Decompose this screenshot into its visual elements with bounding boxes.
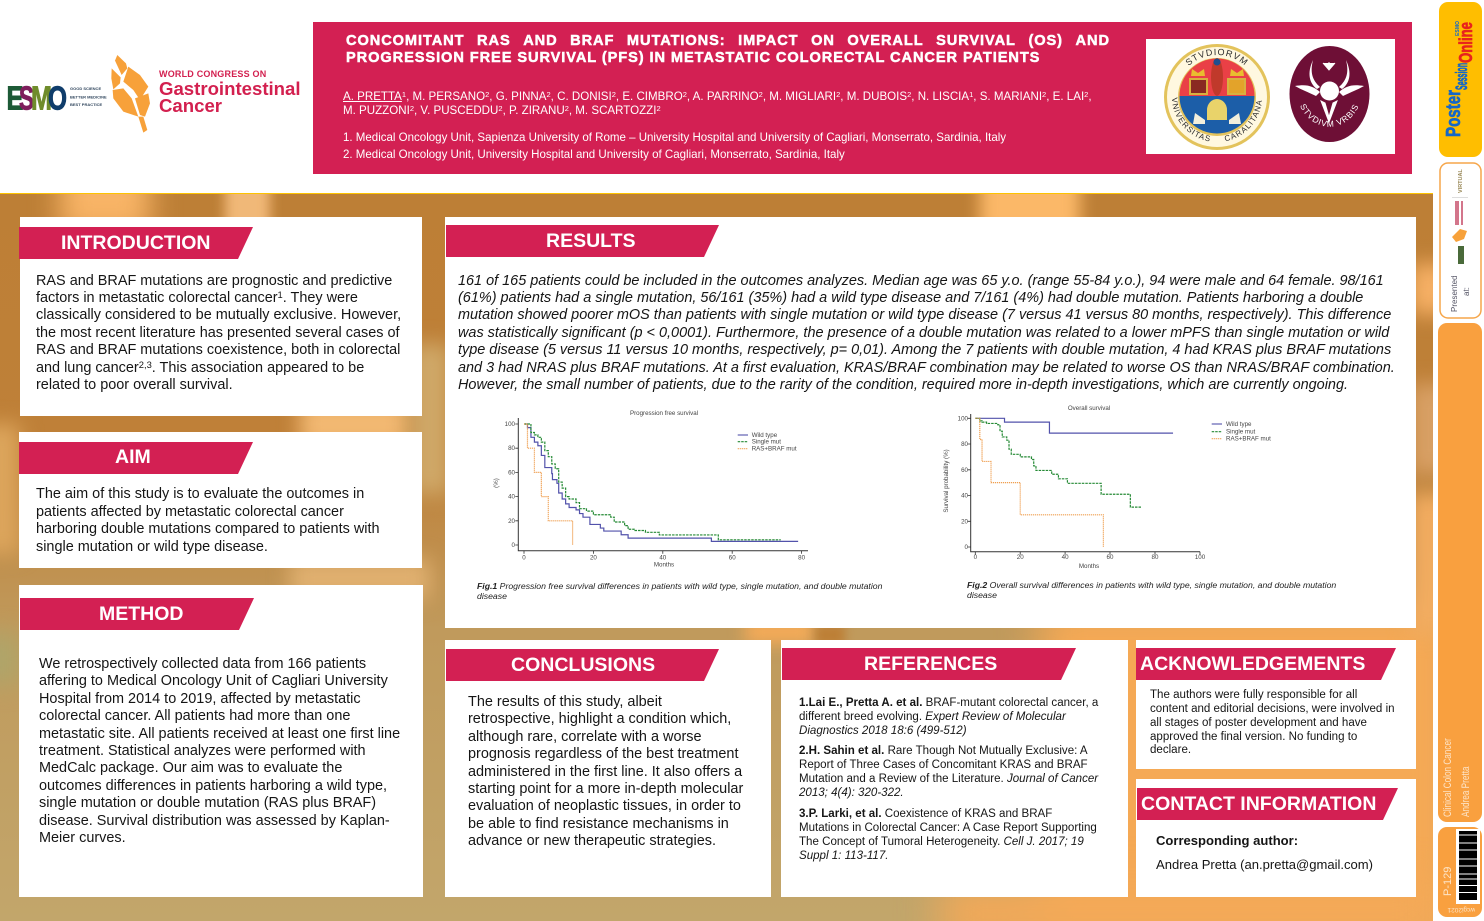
text: conclusions: prognosis regardless of the best treatment	[468, 746, 738, 762]
text: aim: patients affected by metastatic colorectal cancer	[36, 504, 344, 520]
panel: method	[19, 585, 423, 897]
text: acknowledgements: The authors were fully responsible for all	[1150, 689, 1357, 701]
figure 2 caption: Fig.2 Overall survival differences in patients with wild type, single mutation, and double mutation	[967, 580, 1336, 590]
chart: progression free survival: 20	[508, 518, 516, 525]
authors: M. PUZZONI2, V. PUSCEDDU2, P. ZIRANU2, M. SCARTOZZI2	[343, 104, 661, 117]
text: method: single mutation or double mutation (RAS plus BRAF)	[39, 795, 376, 811]
chart: overall survival: 40	[961, 492, 969, 500]
panel: aim	[19, 432, 422, 568]
text: method	[39, 656, 400, 846]
poster title: IMPACT	[738, 33, 798, 49]
text: acknowledgements: all stages of poster development and have	[1150, 717, 1367, 729]
legend: Wild type	[1226, 421, 1252, 428]
sidebar tab: session and author: Clinical Colon Cancer	[1442, 738, 1454, 817]
figure 1 caption: disease	[477, 591, 507, 601]
ESMO motto	[70, 86, 107, 107]
text: conclusions: evaluation of neoplastic tissues, in order to	[468, 798, 741, 814]
ESMO motto: BETTER MEDICINE	[70, 94, 107, 100]
text: method: colorectal cancer. All patients had more than one	[39, 708, 350, 724]
reference 1	[799, 697, 1098, 737]
panel: introduction	[20, 217, 422, 416]
heading: aim	[19, 442, 253, 474]
legend: Wild type	[752, 432, 778, 439]
panel: references	[781, 640, 1128, 897]
legend: RAS+BRAF mut	[1226, 436, 1271, 443]
chart: overall survival: 0	[965, 544, 969, 551]
logo: ESMO	[6, 80, 107, 116]
ESMO letters: O	[48, 80, 67, 116]
chart: overall survival: 80	[1152, 554, 1159, 561]
poster title: AND	[1076, 33, 1110, 49]
text: conclusions: retrospective, highlight a condition which,	[468, 711, 731, 727]
reference 2: 2013; 4(4): 320-322.	[799, 787, 904, 799]
congress title: Cancer	[159, 95, 222, 116]
heading: contact information: CONTACT INFORMATION	[1141, 793, 1376, 815]
reference 2: Mutation and a Review of the Literature. Journal of Cancer	[799, 773, 1098, 785]
text: acknowledgements: declare.	[1150, 744, 1191, 756]
text: introduction: classically considered to be mutually exclusive. However,	[36, 307, 401, 323]
text: results: 161 of 165 patients could be included in the outcomes analyzes. Median age was 65 y.o. (range 55-84 y.o.), 94 were male and 64 female. 98/161	[458, 272, 1384, 288]
heading: results	[446, 225, 719, 257]
congress title	[159, 68, 301, 116]
reference 3: 3.P. Larki, et al. Coexistence of KRAS and BRAF	[799, 808, 1052, 820]
reference 3: The Concept of Tumoral Heterogeneity. Cell J. 2017; 19	[799, 836, 1084, 848]
reference 2: Report of Three Cases of Concomitant KRAS and BRAF	[799, 759, 1088, 771]
text: acknowledgements: content and editorial decisions, were involved in	[1150, 703, 1395, 715]
curve: wild type	[524, 424, 798, 541]
sidebar tab: poster session online: Session	[1452, 63, 1471, 90]
poster title: AND	[523, 33, 558, 49]
affiliations: 2. Medical Oncology Unit, University Hospital and University of Cagliari, Monserrato, Sardinia, Italy	[343, 149, 845, 161]
chart: progression free survival: 40	[659, 554, 667, 562]
congress title: Gastrointestinal	[159, 78, 301, 99]
congress title: WORLD CONGRESS ON	[159, 68, 266, 78]
text: conclusions: although rare, correlate with a worse	[468, 729, 702, 745]
authors	[343, 90, 1092, 117]
reference 3	[799, 808, 1097, 862]
chart: progression free survival: 40	[508, 494, 516, 500]
ESMO letters: E	[6, 80, 24, 116]
heading: references	[782, 648, 1076, 680]
chart: progression free survival: Progression free survival	[630, 410, 698, 417]
text: introduction: and lung cancer2,3. This association appeared to be	[36, 359, 364, 376]
chart: overall survival: 100	[1195, 554, 1206, 561]
chart: overall survival: 100	[958, 416, 969, 422]
text: conclusions: The results of this study, albeit	[468, 694, 662, 710]
reference 1: Diagnostics 2018 18:6 (499-512)	[799, 725, 967, 737]
chart: progression free survival: 80	[798, 554, 806, 562]
chart: overall survival	[943, 405, 1271, 570]
seal: University of Cagliari: VNIVERSITAS	[1172, 97, 1210, 142]
chart: progression free survival: 80	[508, 445, 516, 452]
heading: acknowledgements	[1136, 648, 1396, 680]
university logos	[1146, 39, 1395, 154]
chart: overall survival: Survival probability (%)	[943, 449, 950, 513]
chart: overall survival: Months	[1079, 563, 1099, 570]
text: introduction: RAS and BRAF mutations coexistence, both in colorectal	[36, 342, 400, 358]
poster title: BRAF	[570, 33, 614, 49]
chart: progression free survival: 0	[522, 554, 526, 562]
sidebar tab: poster number and barcode	[1438, 827, 1482, 917]
chart: progression free survival: 20	[590, 554, 597, 562]
chart: progression free survival: Months	[654, 562, 674, 568]
sidebar tab: poster session online: ESMO	[1455, 21, 1461, 36]
chart: overall survival: 20	[961, 518, 969, 526]
legend: RAS+BRAF mut	[752, 446, 797, 453]
panel: conclusions	[445, 640, 771, 897]
header panel	[313, 22, 1412, 174]
heading: contact information	[1137, 788, 1398, 820]
text: method: outcomes differences in patients harboring a wild type,	[39, 778, 387, 794]
text: results	[458, 272, 1395, 393]
chart: overall survival: 20	[1017, 554, 1024, 561]
chart: overall survival: Overall survival	[1068, 405, 1110, 412]
ESMO letters: M	[31, 80, 52, 116]
legend: Single mut	[752, 439, 781, 446]
heading: conclusions	[446, 649, 719, 681]
legend: Single mut	[1226, 429, 1256, 436]
curve: single mutation	[524, 424, 781, 540]
reference 3: Mutations in Colorectal Cancer: A Case Report Supporting	[799, 822, 1097, 834]
sidebar tab: poster session online	[1439, 2, 1482, 157]
text: aim: single mutation or wild type disease.	[36, 539, 268, 555]
poster title: SURVIVAL	[936, 33, 1016, 49]
text: contact details: Andrea Pretta (an.pretta@gmail.com)	[1156, 857, 1373, 872]
chart: progression free survival: (%)	[493, 478, 500, 488]
legend	[1212, 421, 1271, 443]
heading: acknowledgements: ACKNOWLEDGEMENTS	[1140, 653, 1365, 675]
sidebar tab: poster number and barcode: P-129	[1442, 867, 1454, 896]
affiliations: 1. Medical Oncology Unit, Sapienza University of Rome – University Hospital and University of Cagliari, Monserrato, Sardinia, Italy	[343, 132, 1006, 144]
poster title	[346, 33, 1110, 66]
text: acknowledgements	[1150, 689, 1395, 756]
poster title: (OS)	[1028, 33, 1063, 49]
seal: University of Cagliari: CARALITANA	[1224, 100, 1262, 141]
poster title: MUTATIONS:	[627, 33, 726, 49]
text: contact details: Corresponding author:	[1156, 833, 1298, 848]
sidebar tab: session and author: Andrea Pretta	[1460, 766, 1472, 817]
panel: acknowledgements	[1136, 640, 1416, 769]
poster title: ON	[811, 33, 835, 49]
seal: Sapienza: STVDIVM VRBIS	[1300, 104, 1358, 127]
text: introduction	[36, 272, 401, 393]
text: results: However, the small number of patients, due to the rarity of the condition, required more in-depth investigations, which are currently ongoing.	[458, 377, 1348, 393]
text: aim: The aim of this study is to evaluate the outcomes in	[36, 486, 364, 502]
text: method: Hospital from 2014 to 2019, affected by metastatic	[39, 691, 361, 707]
reference 2: 2.H. Sahin et al. Rare Though Not Mutually Exclusive: A	[799, 745, 1088, 757]
text: method: affering to Medical Oncology Unit of Cagliari University	[39, 673, 388, 689]
figure 2 caption: disease	[967, 590, 997, 600]
chart: progression free survival	[493, 410, 808, 568]
panel: contact information	[1136, 779, 1416, 897]
seal: University of Cagliari	[1164, 44, 1270, 150]
sidebar tab: presented at: VIRTUAL	[1458, 169, 1464, 193]
figure 1 caption: Fig.1 Progression free survival differences in patients with wild type, single mutation, and double mutation	[477, 580, 882, 590]
text: conclusions: starting point for a more in-depth molecular	[468, 781, 743, 797]
text: introduction: the most recent literature has presented several cases of	[36, 325, 400, 341]
reference 2	[798, 745, 1098, 799]
text: acknowledgements: approved the final version. No funding to	[1150, 731, 1357, 743]
text: conclusions: advance or new therapeutic strategies.	[468, 833, 716, 849]
text: method: MedCalc package. Our aim was to evaluate the	[39, 760, 342, 776]
poster title: RAS	[477, 33, 511, 49]
text: conclusions: administered in the first line. It also offers a	[468, 764, 742, 780]
text: results: mutation showed poorer mOS than patients with single mutation or wild type disease (7 versus 41 versus 80 months, respectively). This difference	[458, 307, 1391, 323]
figure 2 caption	[967, 580, 1336, 600]
text: method: treatment. Statistical analyzes were performed with	[39, 743, 366, 759]
seal: Sapienza	[1290, 46, 1370, 142]
seal: University of Cagliari: STVDIORVM	[1186, 48, 1248, 65]
chart: progression free survival: 0	[512, 542, 516, 549]
text: introduction: RAS and BRAF mutations are prognostic and predictive	[36, 272, 392, 288]
sidebar tab: presented at: Presented	[1450, 276, 1459, 312]
text: contact details	[1156, 833, 1373, 872]
reference 1: 1.Lai E., Pretta A. et al. BRAF-mutant colorectal cancer, a	[799, 697, 1098, 709]
ESMO letters: S	[19, 80, 34, 116]
sidebar tab: poster number and barcode: wcgi2021	[1447, 906, 1476, 913]
chart: overall survival: 80	[961, 441, 969, 448]
text: method: disease. Survival distribution was assessed by Kaplan-	[39, 813, 390, 829]
poster title: PROGRESSION FREE SURVIVAL (PFS) IN METASTATIC COLORECTAL CANCER PATIENTS	[346, 50, 1040, 66]
chart: progression free survival: 60	[729, 554, 736, 562]
heading: introduction	[19, 227, 253, 259]
chart: progression free survival: 100	[505, 421, 516, 428]
chart: overall survival: 60	[1107, 554, 1114, 561]
heading: references: REFERENCES	[864, 653, 997, 675]
text: aim: harboring double mutations compared to patients with	[36, 521, 380, 537]
text: conclusions: be able to find resistance mechanisms in	[468, 816, 729, 832]
sidebar tab: poster session online: Poster	[1443, 90, 1465, 137]
text: method: Meier curves.	[39, 830, 126, 846]
poster title: OVERALL	[847, 33, 924, 49]
text: introduction: related to poor overall survival.	[36, 377, 233, 393]
text: results: (61%) patients had a single mutation, 56/161 (35%) had a wild type disease and 7/161 (4%) had double mutation. Patients harboring a double	[458, 290, 1363, 306]
heading: results: RESULTS	[546, 230, 636, 252]
text: results: and 3 had NRAS plus BRAF mutations. At a first evaluation, KRAS/BRAF combination may be related to worse OS than NRAS/BRAF combination.	[458, 360, 1395, 376]
chart: overall survival: 60	[961, 467, 969, 474]
heading: method: METHOD	[99, 603, 184, 625]
curve: RAS plus BRAF	[524, 424, 573, 545]
poster title: CONCOMITANT	[346, 33, 464, 49]
chart: overall survival: 40	[1062, 554, 1069, 561]
text: aim	[36, 486, 380, 555]
logo: leaf	[111, 55, 150, 133]
text: method: We retrospectively collected data from 166 patients	[39, 656, 366, 672]
text: results: was statistically significant (p < 0,0001). Furthermore, the presence of a double mutation was related to a lower mPFS than single mutation or wild	[458, 325, 1389, 341]
sidebar tab: presented at: at:	[1462, 287, 1471, 296]
heading: conclusions: CONCLUSIONS	[511, 654, 655, 676]
ESMO letters	[6, 80, 67, 116]
chart: overall survival: 0	[974, 554, 978, 561]
curve: single mutation	[975, 418, 1142, 507]
text: introduction: factors in metastatic colorectal cancer1. They were	[36, 289, 358, 306]
sidebar tab: session and author	[1438, 323, 1482, 822]
legend	[738, 432, 797, 453]
text: results: type disease (5 versus 11 versus 10 months, respectively, p= 0,01). Among the 7 patients with double mutation, 4 had KRAS plus BRAF mutations	[458, 342, 1391, 358]
panel: results	[445, 217, 1416, 628]
sidebar	[1438, 2, 1482, 917]
sidebar tab: presented at	[1440, 163, 1481, 318]
chart: progression free survival: 60	[508, 470, 516, 476]
affiliations	[343, 132, 1006, 161]
ESMO motto: BEST PRACTICE	[70, 102, 103, 107]
curve: wild type	[975, 418, 1173, 433]
background texture	[0, 193, 1433, 921]
heading: method	[20, 598, 254, 630]
figure 1 caption	[477, 580, 882, 601]
text: conclusions	[468, 694, 744, 849]
curve: RAS plus BRAF	[975, 418, 1103, 547]
heading: aim: AIM	[115, 446, 151, 468]
authors: A. PRETTA1, M. PERSANO2, G. PINNA2, C. DONISI2, E. CIMBRO2, A. PARRINO2, M. MIGLIARI2, M. DUBOIS2, N. LISCIA1, S. MARIANI2, E. LAI2,	[343, 90, 1092, 102]
text: method: metastatic site. All patients received at least one first line	[39, 726, 400, 742]
reference 1: different breed evolving. Expert Review of Molecular	[799, 711, 1066, 723]
sidebar tab: poster session online: Online	[1456, 22, 1476, 63]
ESMO motto: GOOD SCIENCE	[70, 86, 101, 91]
reference 3: Suppl 1: 113-117.	[799, 850, 888, 862]
heading: introduction: INTRODUCTION	[61, 232, 210, 254]
